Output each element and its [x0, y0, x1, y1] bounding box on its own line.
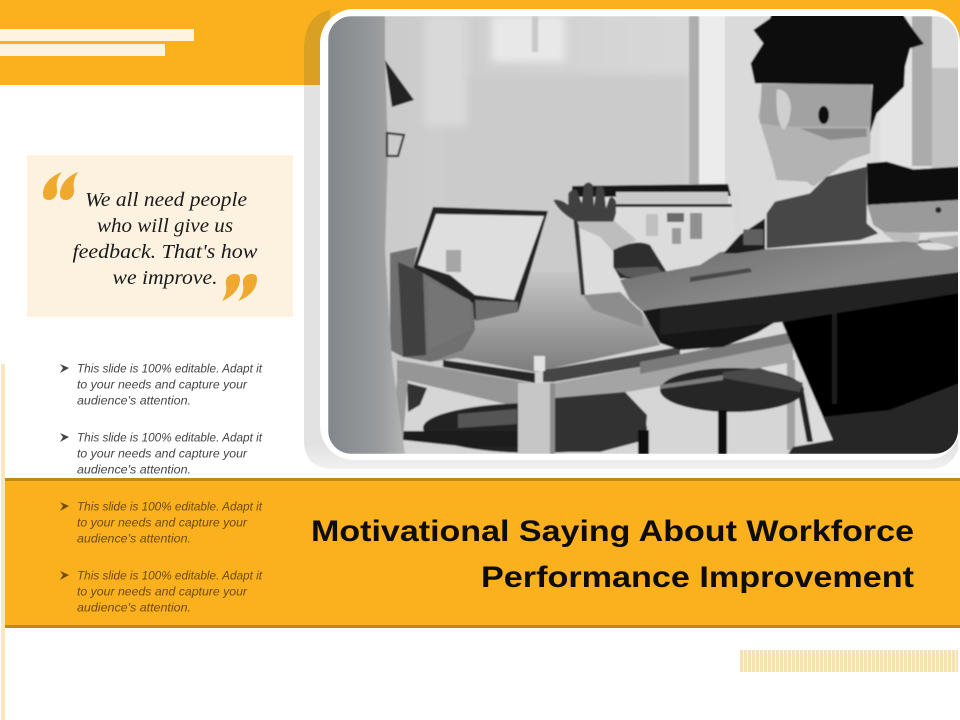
bullet 3: to your needs and capture your	[77, 518, 248, 530]
orange title band	[5, 478, 960, 628]
title: Performance Improvement	[481, 561, 914, 594]
quote text: who will give us	[97, 215, 233, 237]
bullet list	[60, 364, 263, 614]
title: Motivational Saying About Workforce	[311, 515, 914, 548]
bullet 4: to your needs and capture your	[77, 586, 248, 598]
icon: closing quote mark	[222, 274, 257, 301]
quote panel	[27, 155, 293, 317]
bullet 1	[60, 364, 263, 408]
left laptop	[413, 207, 548, 321]
top left cream bars	[0, 29, 194, 56]
man: jacket and iMac	[723, 162, 960, 253]
photo frame	[320, 9, 960, 460]
bullet 2: to your needs and capture your	[77, 448, 248, 460]
wall and floor	[384, 16, 958, 445]
decorative striped bar	[740, 650, 958, 672]
top orange band	[0, 0, 960, 85]
left pillar with face and glasses	[328, 16, 414, 454]
bullet 1: to your needs and capture your	[77, 380, 248, 392]
bullet 2	[60, 432, 263, 476]
left person arm	[390, 247, 475, 362]
right chair	[660, 368, 813, 454]
table legs	[518, 383, 555, 454]
bullet 1: This slide is 100% editable. Adapt it	[77, 364, 263, 376]
photo: colleagues at laptops	[328, 16, 958, 454]
icon: opening quote mark	[43, 172, 78, 200]
bullet 3: This slide is 100% editable. Adapt it	[77, 502, 263, 514]
man: head and hair	[751, 10, 924, 187]
hand and forearm	[553, 182, 672, 280]
quote text: We all need people	[85, 189, 247, 211]
bullet 1: audience's attention.	[77, 396, 191, 408]
near table, dark clothing and floor	[620, 238, 960, 454]
bullet 3: audience's attention.	[77, 534, 191, 546]
quote text	[72, 189, 258, 289]
quote text: feedback. That's how	[72, 241, 258, 263]
photo frame shadow	[304, 9, 958, 469]
bullet 3	[60, 502, 263, 546]
bullet 2: This slide is 100% editable. Adapt it	[77, 432, 263, 444]
left chair	[403, 383, 649, 454]
left vertical stripe	[1, 364, 5, 720]
quote text: we improve.	[112, 267, 218, 289]
bullet 4: This slide is 100% editable. Adapt it	[77, 570, 263, 582]
title	[311, 515, 914, 594]
table apron and edges	[397, 360, 530, 407]
right laptop	[572, 184, 736, 327]
far tabletop	[430, 272, 660, 372]
bullet 4	[60, 570, 263, 614]
bullet 2: audience's attention.	[77, 464, 191, 476]
bullet 4: audience's attention.	[77, 602, 191, 614]
